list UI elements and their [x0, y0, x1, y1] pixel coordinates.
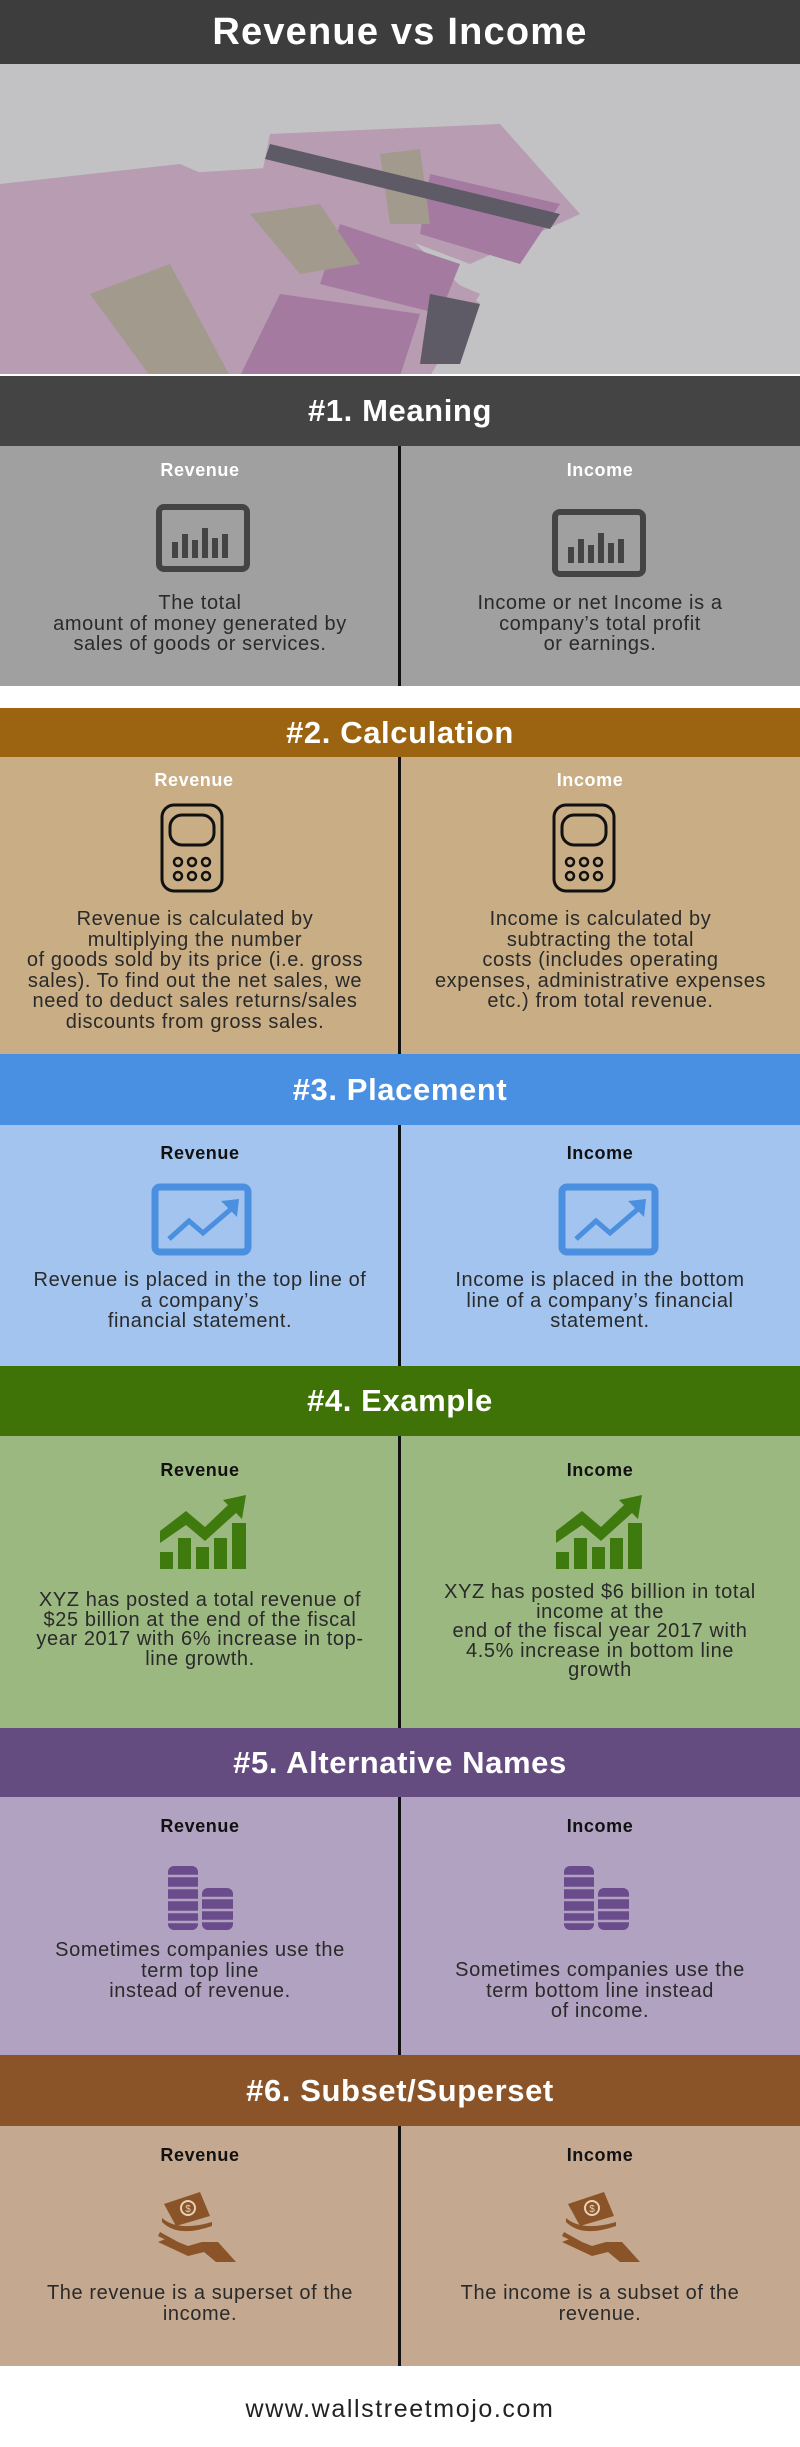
text: revenue calculation: Revenue is calculated by — [77, 908, 313, 930]
label: income: Income — [567, 1143, 633, 1163]
icon: bar chart left — [156, 504, 250, 572]
text: income example: end of the fiscal year 2017 with — [453, 1620, 747, 1642]
text: income subset: revenue. — [559, 2302, 641, 2324]
header: meaning — [0, 376, 800, 446]
header: placement: #3. Placement — [293, 1072, 507, 1107]
text: revenue alternative: term top line — [141, 1960, 259, 1982]
label: income: Income — [567, 2145, 633, 2165]
text: revenue example: $25 billion at the end of the fiscal — [44, 1608, 356, 1630]
label: revenue: Revenue — [160, 2145, 240, 2165]
icon: money in hand right — [562, 2192, 640, 2262]
text: income example: growth — [568, 1659, 632, 1681]
text: income calculation — [435, 908, 766, 1012]
text: income meaning: company’s total profit — [499, 612, 701, 634]
text: income placement: Income is placed in the bottom — [455, 1269, 745, 1291]
photo: euro banknotes — [0, 64, 800, 376]
text: revenue meaning: sales of goods or services. — [74, 633, 326, 655]
panel: placement — [0, 1125, 800, 1366]
icon: calculator left — [160, 804, 224, 892]
text: revenue meaning: amount of money generated by — [53, 612, 347, 634]
text: revenue calculation — [27, 908, 363, 1032]
header: subset/superset: #6. Subset/Superset — [246, 2073, 554, 2108]
label: revenue: Revenue — [160, 460, 240, 480]
icon: growth chart right — [556, 1495, 642, 1569]
header: placement — [0, 1054, 800, 1125]
icon: bar chart right — [552, 509, 646, 577]
text: revenue placement: financial statement. — [108, 1310, 292, 1332]
text: income example — [444, 1581, 756, 1681]
text: revenue calculation: need to deduct sales returns/sales — [32, 990, 358, 1012]
icon: growth chart left — [160, 1495, 246, 1569]
text: income meaning: Income or net Income is a — [477, 592, 723, 614]
text: revenue example — [36, 1589, 364, 1670]
panel: example — [0, 1436, 800, 1728]
icon: coins left — [168, 1866, 233, 1930]
text: revenue calculation: discounts from gross sales. — [66, 1010, 324, 1032]
text: revenue superset — [47, 2282, 353, 2324]
header: example: #4. Example — [307, 1383, 493, 1418]
text: income alternative: Sometimes companies use the — [455, 1959, 745, 1981]
title — [0, 0, 800, 64]
text: revenue meaning — [53, 592, 347, 655]
footer: website: www.wallstreetmojo.com — [246, 2395, 554, 2423]
text: income meaning: or earnings. — [544, 633, 656, 655]
text: revenue alternative: instead of revenue. — [109, 1980, 291, 2002]
header: calculation — [0, 708, 800, 757]
panel: alternative names — [0, 1797, 800, 2055]
label: revenue: Revenue — [154, 770, 234, 790]
text: revenue meaning: The total — [158, 592, 242, 614]
text: income example: XYZ has posted $6 billion in total — [444, 1581, 756, 1603]
label: income: Income — [567, 1816, 633, 1836]
text: revenue example: XYZ has posted a total revenue of — [39, 1589, 361, 1611]
text: income alternative — [455, 1959, 745, 2022]
text: revenue superset: The revenue is a superset of the — [47, 2282, 353, 2304]
text: revenue placement: a company’s — [141, 1290, 259, 1312]
panel: meaning — [0, 446, 800, 686]
icon: money in hand right: $ — [589, 2204, 595, 2215]
icon: coins right — [564, 1866, 629, 1930]
text: income example: income at the — [536, 1600, 664, 1622]
header: alternative names — [0, 1728, 800, 1797]
text: income placement: statement. — [550, 1310, 650, 1332]
panel: subset/superset — [0, 2126, 800, 2366]
panel: calculation — [0, 757, 800, 1054]
label: income: Income — [557, 770, 623, 790]
text: revenue placement: Revenue is placed in the top line of — [34, 1269, 366, 1291]
text: income subset: The income is a subset of the — [461, 2282, 739, 2304]
label: revenue: Revenue — [160, 1143, 240, 1163]
text: revenue example: line growth. — [145, 1648, 255, 1670]
text: income example: 4.5% increase in bottom line — [466, 1640, 734, 1662]
text: revenue calculation: multiplying the number — [88, 928, 302, 950]
text: revenue example: year 2017 with 6% increase in top- — [36, 1628, 364, 1650]
header: subset/superset — [0, 2055, 800, 2126]
text: income calculation: expenses, administrative expenses — [435, 970, 766, 992]
text: income calculation: etc.) from total revenue. — [487, 990, 714, 1012]
text: income subset — [461, 2282, 739, 2324]
text: revenue calculation: of goods sold by its price (i.e. gross — [27, 949, 363, 971]
header: example — [0, 1366, 800, 1436]
label: income: Income — [567, 460, 633, 480]
text: income placement — [455, 1269, 745, 1332]
label: income: Income — [567, 1460, 633, 1480]
icon: calculator right — [552, 804, 616, 892]
text: revenue alternative — [55, 1939, 345, 2002]
text: revenue alternative: Sometimes companies use the — [55, 1939, 345, 1961]
header: alternative names: #5. Alternative Names — [233, 1745, 567, 1780]
text: revenue calculation: sales). To find out the net sales, we — [28, 970, 362, 992]
text: income placement: line of a company’s financial — [466, 1290, 734, 1312]
text: revenue placement — [34, 1269, 366, 1332]
label: revenue: Revenue — [160, 1816, 240, 1836]
text: income alternative: of income. — [551, 2000, 649, 2022]
title: Revenue vs Income — [212, 11, 588, 53]
text: income calculation: subtracting the total — [507, 928, 694, 950]
text: income calculation: costs (includes operating — [482, 949, 719, 971]
icon: money in hand left: $ — [185, 2204, 191, 2215]
header: meaning: #1. Meaning — [308, 393, 492, 428]
icon: trend screen right — [558, 1184, 658, 1256]
text: income alternative: term bottom line instead — [486, 1980, 714, 2002]
label: revenue: Revenue — [160, 1460, 240, 1480]
text: income calculation: Income is calculated by — [490, 908, 711, 930]
text: income meaning — [477, 592, 723, 655]
text: revenue superset: income. — [163, 2302, 237, 2324]
icon: money in hand left — [158, 2192, 236, 2262]
header: calculation: #2. Calculation — [286, 715, 514, 750]
icon: trend screen left — [152, 1184, 252, 1256]
